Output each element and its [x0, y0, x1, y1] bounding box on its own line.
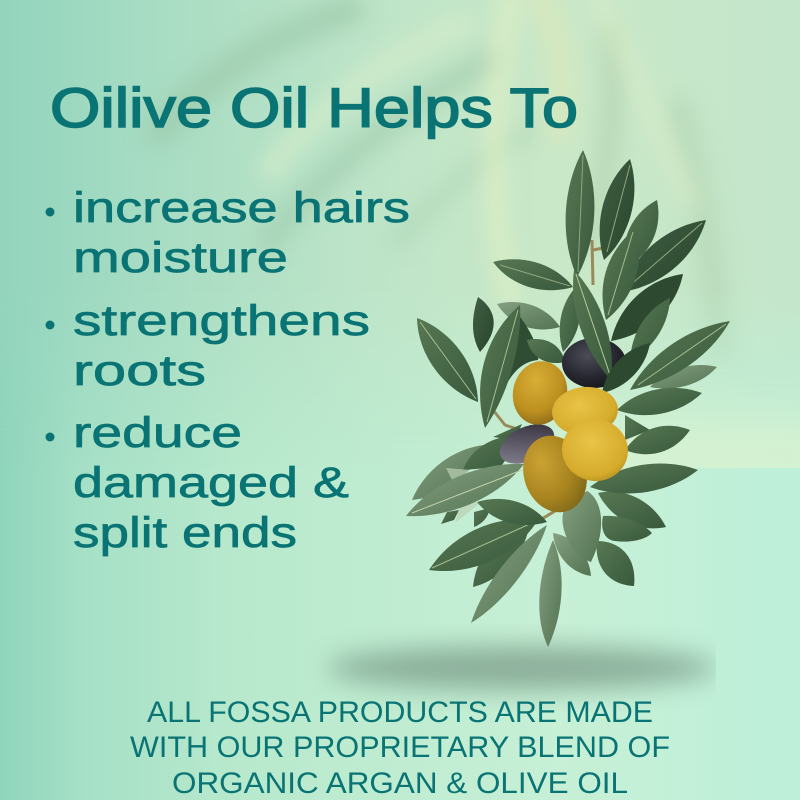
branch shadow — [327, 646, 717, 690]
lower right leaves — [590, 388, 702, 493]
left leaves — [417, 305, 520, 428]
footer statement: ALL FOSSA PRODUCTS ARE MADE — [147, 696, 653, 729]
bullet: reduce damaged and split ends: reduce — [73, 409, 242, 457]
green olive top — [550, 384, 620, 438]
purple olive — [494, 416, 560, 472]
benefits list — [46, 184, 410, 557]
title: Oilive Oil Helps To — [50, 76, 578, 139]
bullet: strengthens roots: roots — [73, 347, 206, 395]
back leaves upper — [473, 200, 717, 397]
stem — [485, 240, 603, 520]
bullet: increase hairs moisture: moisture — [73, 234, 288, 282]
bullet: strengthens roots: strengthens — [73, 297, 370, 345]
top leaves — [493, 150, 730, 390]
olive branch illustration — [406, 150, 730, 647]
green olive lower — [513, 427, 597, 521]
bullet: reduce damaged and split ends: split ends — [73, 509, 297, 557]
lower back leaves — [412, 424, 666, 647]
front left leaf — [406, 464, 524, 516]
footer statement — [130, 696, 670, 800]
bullet: reduce damaged and split ends: damaged & — [73, 459, 349, 507]
black olive — [562, 338, 626, 388]
green olive front — [557, 414, 633, 486]
background upper panel with light rays — [122, 0, 800, 468]
bullet: strengthens roots — [46, 297, 370, 395]
centre front leaf — [573, 270, 650, 393]
footer statement: ORGANIC ARGAN & OLIVE OIL — [172, 767, 628, 800]
green olive left — [507, 356, 573, 430]
footer statement: WITH OUR PROPRIETARY BLEND OF — [130, 731, 670, 764]
bullet: increase hairs moisture — [46, 184, 410, 282]
bullet: increase hairs moisture: increase hairs — [73, 184, 410, 232]
bullet: reduce damaged and split ends — [46, 409, 349, 557]
